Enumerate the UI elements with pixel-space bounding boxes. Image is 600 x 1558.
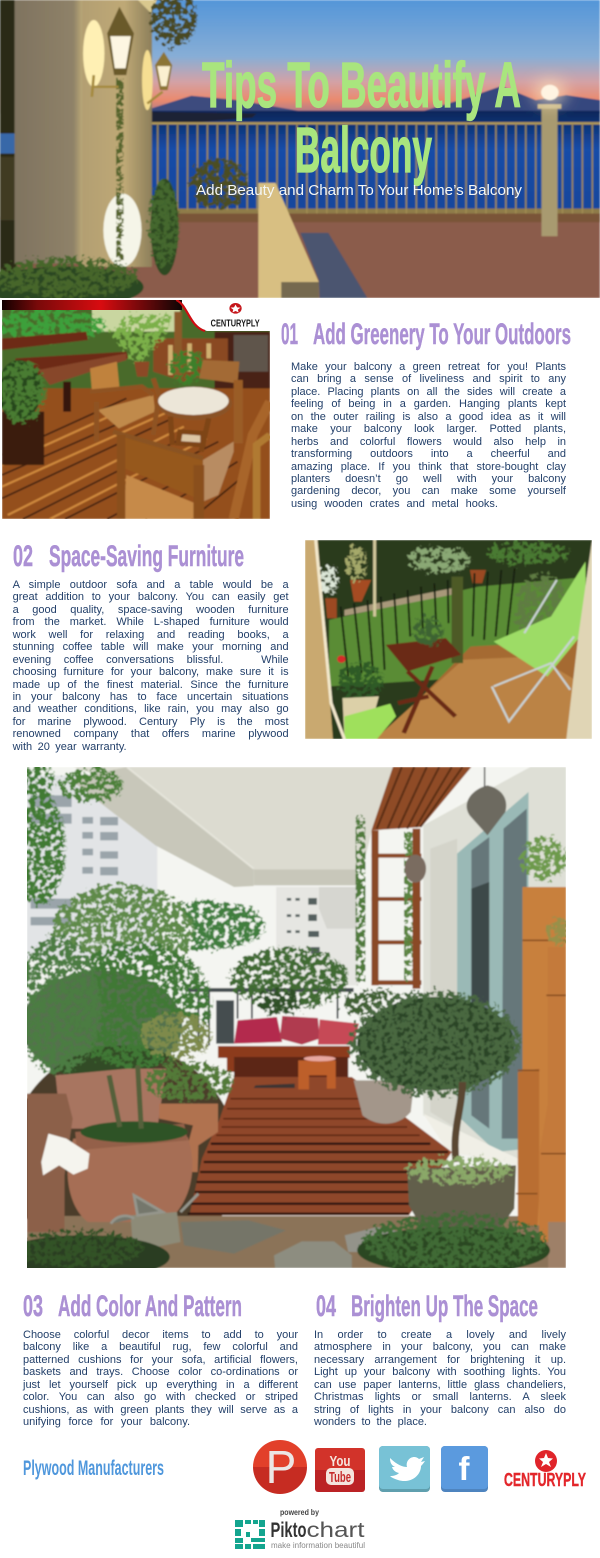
text block 01: amazing place. If you think that store-bought clay: [291, 460, 566, 472]
text block 04: necessary arrangement for brightening it up.: [314, 1354, 566, 1366]
title and subtitle: [196, 49, 522, 199]
text block 02: made up of the finest material. Since the furniture: [13, 678, 289, 690]
icon: pinterest: P: [266, 1441, 296, 1493]
text block 02: choosing furniture for your balcony, make sure it is: [13, 666, 289, 678]
text block 01: make your balcony look larger. Potted plants,: [291, 423, 566, 435]
logo: powered by piktochart: make information beautiful: [271, 1541, 365, 1550]
heading 01: 01: [281, 318, 298, 351]
heading 02: 02: [13, 540, 33, 573]
text block 03: balcony like a beautiful rug, few colorful and: [23, 1341, 298, 1353]
photo: small balcony with folding chairs: [305, 540, 592, 739]
heading 04: 04: [316, 1290, 336, 1323]
logo: centuryply: [504, 1450, 586, 1490]
text block 02: renowned company that offers marine plywood: [13, 728, 289, 740]
icon: youtube: [315, 1448, 365, 1492]
icon: pinterest: [253, 1440, 307, 1494]
text block 01: transforming outdoors into a cheerful and: [291, 448, 566, 460]
text block 01: Make your balcony a green retreat for you! Plants: [291, 361, 566, 373]
text block 02: stunning coffee table will make your morning and: [13, 641, 289, 653]
text block 01: [291, 361, 566, 510]
text block 01: gardening decor, you can make some yourself: [291, 485, 566, 497]
text block 03: Choose colorful decor items to add to your: [23, 1329, 298, 1341]
text block 04: string of lights in your balcony can also do: [314, 1404, 566, 1416]
text block 03: baskets and trays. Choose color co-ordinations or: [23, 1366, 298, 1378]
text block 01: on the outer railing is also a good idea as it will: [291, 411, 566, 423]
text block 01: using wooden crates and metal hooks.: [291, 498, 498, 510]
text block 02: A simple outdoor sofa and a table would be a: [13, 579, 289, 591]
icon: facebook: f: [458, 1450, 470, 1487]
text block 03: unifying force for your balcony.: [23, 1416, 190, 1428]
text block 02: [12, 579, 289, 753]
panel: 04 brighten up the space: [314, 1290, 566, 1428]
text block 02: a good quality, space-saving wooden furniture: [13, 604, 289, 616]
text block 04: Christmas lights or small lanterns. A sleek: [314, 1391, 566, 1403]
text block 04: atmosphere in your balcony, you can make: [314, 1341, 566, 1353]
icon: youtube: You: [330, 1453, 350, 1470]
logo: powered by piktochart: Pikto: [270, 1519, 306, 1542]
text block 04: In order to create a lovely and lively: [314, 1329, 566, 1341]
panel: hero banner: [0, 0, 600, 298]
text block 02: for marine plywood. Century Ply is the most: [13, 716, 289, 728]
text block 02: with 20 year warranty.: [13, 741, 127, 753]
footer: link, social icons, logos: [23, 1440, 586, 1550]
text block 01: planters doesn’t go well with your balcony: [291, 473, 566, 485]
text block 03: color. You can also go with checked or striped: [23, 1391, 298, 1403]
heading 03: 03: [23, 1290, 43, 1323]
logo: powered by piktochart: [235, 1508, 365, 1550]
text block 04: can use paper lanterns, little glass chandeliers,: [314, 1379, 566, 1391]
text block 01: can bring a sense of liveliness and spirit to any: [291, 373, 566, 385]
text block 03: [22, 1329, 298, 1428]
text block 02: in your balcony has to face uncertain situations: [13, 691, 289, 703]
text block 01: place. Placing plants on all the sides will create a: [291, 386, 566, 398]
text block 02: from the market. While L-shaped furniture would: [13, 616, 289, 628]
title line 2: Balcony: [295, 114, 432, 186]
text block 03: patterned cushions for your sofa, artificial flowers,: [23, 1354, 298, 1366]
text block 01: feeling of being in a garden. Hanging plants kept: [291, 398, 566, 410]
logo: powered by piktochart: powered by: [280, 1508, 319, 1517]
photo: wooden deck furniture with Centuryply banner: [2, 300, 270, 519]
text block 02: evening coffee conversations blissful. While: [13, 654, 289, 666]
text block 04: [314, 1329, 566, 1428]
panel: 02 space-saving furniture: [12, 540, 592, 753]
icon: facebook: [441, 1446, 488, 1492]
link text: plywood manufacturers: Plywood Manufacturers: [23, 1457, 164, 1480]
panel: 03 add color and pattern: [22, 1290, 298, 1428]
text block 02: great addition to your balcony. You can easily get: [13, 591, 289, 603]
subtitle: Add Beauty and Charm To Your Home’s Balcony: [196, 182, 522, 199]
text block 02: work well for relaxing and reading books, a: [13, 629, 289, 641]
text block 04: wonders to the place.: [314, 1416, 427, 1428]
logo: powered by piktochart: chart: [306, 1519, 365, 1542]
text block 03: cushions, as with green plants they will serve as a: [23, 1404, 298, 1416]
icon: twitter: [379, 1446, 430, 1492]
text block 03: just let yourself pick up everything in a different: [23, 1379, 298, 1391]
icon: youtube: Tube: [329, 1469, 351, 1486]
panel: 01 add greenery: [2, 300, 571, 519]
text block 01: herbs and colorful flowers would also help in: [291, 436, 566, 448]
hero photo: balcony at dusk: [0, 0, 600, 298]
text block 02: and weather conditions, like rain, you may also go: [13, 703, 289, 715]
text block 04: Light up your balcony with soothing lights. You: [314, 1366, 566, 1378]
photo: large balcony garden with wooden deck: [27, 767, 566, 1268]
